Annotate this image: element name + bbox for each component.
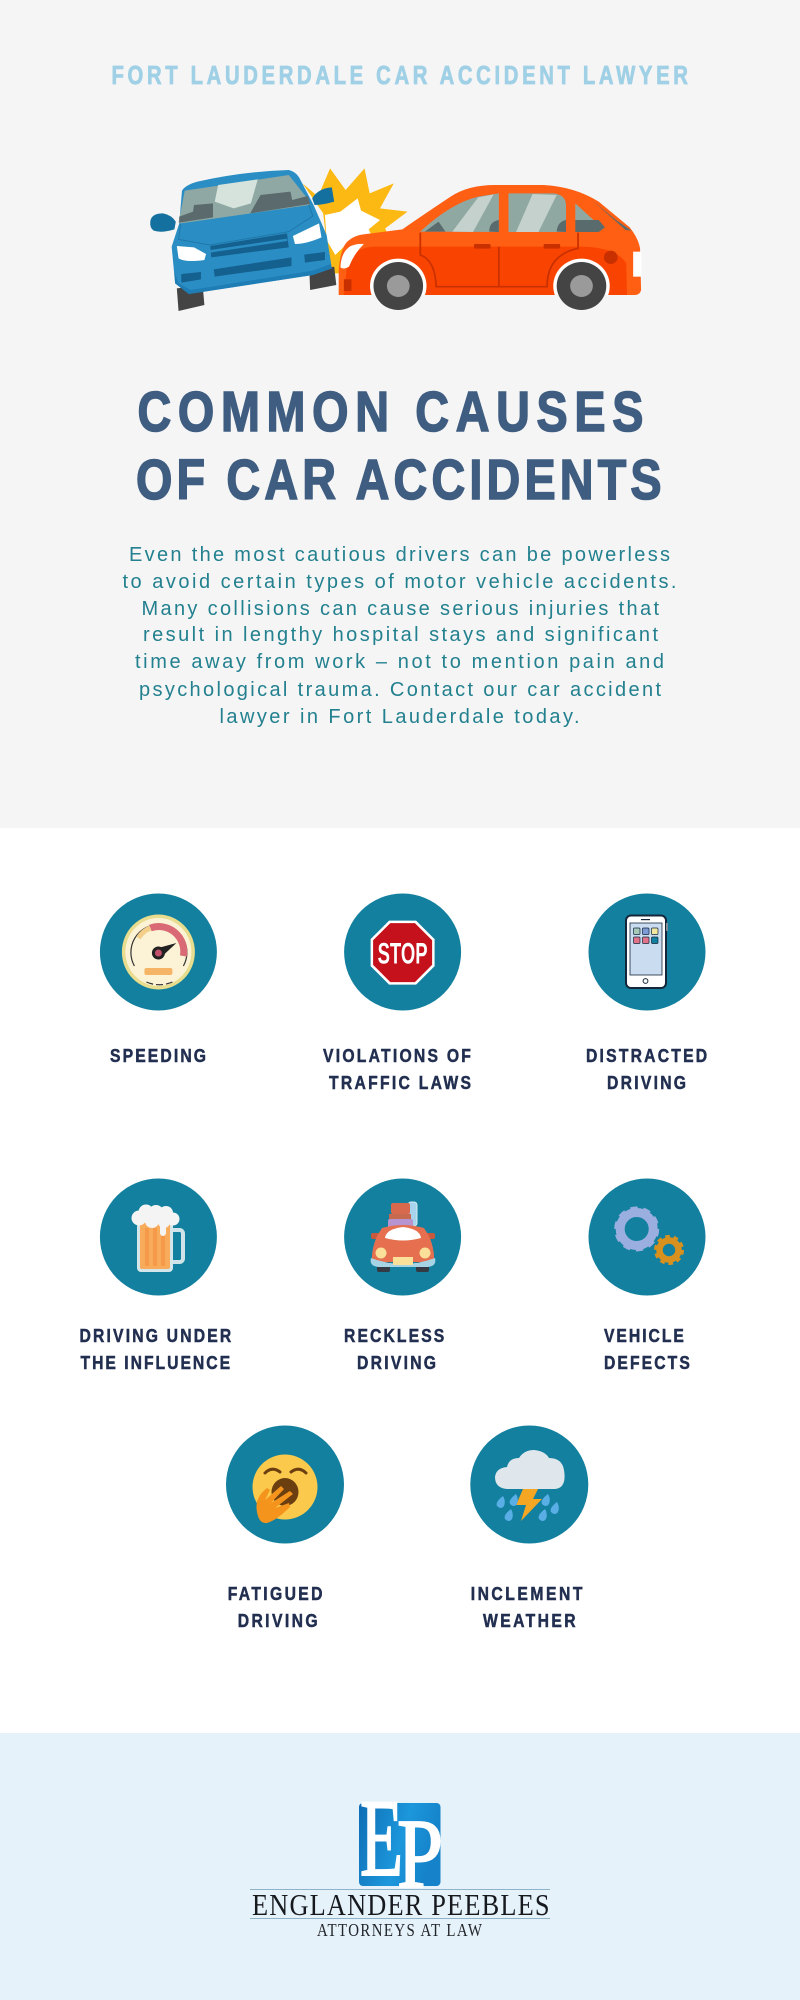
label: VIOLATIONS OF bbox=[323, 1045, 471, 1066]
label: FATIGUED bbox=[228, 1583, 322, 1604]
item: inclement weather bbox=[470, 1426, 588, 1631]
icon: smartphone bbox=[626, 916, 668, 988]
label bbox=[471, 1583, 583, 1631]
blue car windscreen bbox=[179, 175, 309, 223]
illustration: car crash bbox=[150, 168, 641, 315]
red car windows bbox=[420, 193, 499, 232]
label: TRAFFIC LAWS bbox=[329, 1072, 471, 1093]
intro paragraph: lawyer in Fort Lauderdale today. bbox=[220, 706, 580, 728]
heading: OF CAR ACCIDENTS bbox=[136, 449, 662, 512]
red car wheels bbox=[370, 259, 427, 313]
panel: header bbox=[0, 0, 800, 828]
blue car headlights bbox=[177, 246, 206, 261]
logo: ATTORNEYS AT LAW bbox=[317, 1921, 483, 1940]
logo: ENGLANDER PEEBLES bbox=[252, 1888, 550, 1923]
label bbox=[586, 1045, 707, 1093]
icon: beer mug bbox=[132, 1204, 183, 1272]
intro paragraph: Many collisions can cause serious injuries that bbox=[142, 598, 659, 620]
item: speeding bbox=[100, 894, 217, 1066]
label: THE INFLUENCE bbox=[80, 1352, 230, 1373]
label bbox=[604, 1325, 690, 1373]
label: DRIVING bbox=[238, 1610, 318, 1631]
label: VEHICLE bbox=[604, 1325, 684, 1346]
logo bbox=[250, 1777, 550, 1940]
item: reckless driving bbox=[344, 1178, 461, 1373]
label: SPEEDING bbox=[110, 1045, 206, 1066]
item: distracted driving bbox=[586, 894, 707, 1093]
label bbox=[80, 1325, 232, 1373]
icon: yawning face bbox=[252, 1454, 318, 1523]
intro paragraph bbox=[122, 544, 676, 728]
label: DISTRACTED bbox=[586, 1045, 707, 1066]
label: DRIVING UNDER bbox=[80, 1325, 232, 1346]
logo: E bbox=[360, 1777, 403, 1899]
heading bbox=[136, 381, 662, 512]
logo: P bbox=[397, 1800, 443, 1909]
intro paragraph: time away from work – not to mention pain and bbox=[135, 651, 664, 673]
label: DEFECTS bbox=[604, 1352, 690, 1373]
item: vehicle defects bbox=[588, 1178, 706, 1373]
label: DRIVING bbox=[357, 1352, 436, 1373]
eyebrow title: FORT LAUDERDALE CAR ACCIDENT LAWYER bbox=[112, 61, 688, 90]
label bbox=[323, 1045, 471, 1093]
label: RECKLESS bbox=[344, 1325, 444, 1346]
intro paragraph: to avoid certain types of motor vehicle accidents. bbox=[122, 571, 676, 593]
panel: footer bbox=[0, 1733, 800, 2000]
item: violations of traffic laws bbox=[323, 894, 471, 1093]
label: DRIVING bbox=[607, 1072, 686, 1093]
intro paragraph: psychological trauma. Contact our car accident bbox=[139, 679, 661, 701]
label bbox=[228, 1583, 322, 1631]
red car body bbox=[339, 185, 641, 295]
blue car grille bbox=[210, 233, 289, 257]
intro paragraph: Even the most cautious drivers can be powerless bbox=[129, 544, 670, 566]
icon: car with luggage bbox=[371, 1202, 435, 1272]
heading: COMMON CAUSES bbox=[138, 381, 643, 444]
item: fatigued driving bbox=[226, 1426, 344, 1631]
blue car wheels bbox=[177, 285, 204, 311]
icon: speedometer bbox=[122, 914, 195, 990]
blue car body bbox=[172, 170, 332, 294]
blue car mirrors bbox=[150, 213, 176, 232]
label bbox=[344, 1325, 444, 1373]
icon: storm cloud bbox=[495, 1450, 565, 1521]
icon: stop sign: STOP bbox=[378, 938, 428, 971]
label: WEATHER bbox=[483, 1610, 576, 1631]
icon: gears bbox=[617, 1209, 682, 1263]
intro paragraph: result in lengthy hospital stays and significant bbox=[143, 624, 658, 646]
red car doors bbox=[420, 233, 578, 287]
icon: stop sign bbox=[371, 921, 435, 985]
item: driving under the influence bbox=[80, 1178, 232, 1373]
label: INCLEMENT bbox=[471, 1583, 583, 1604]
yellow burst bbox=[303, 168, 408, 273]
